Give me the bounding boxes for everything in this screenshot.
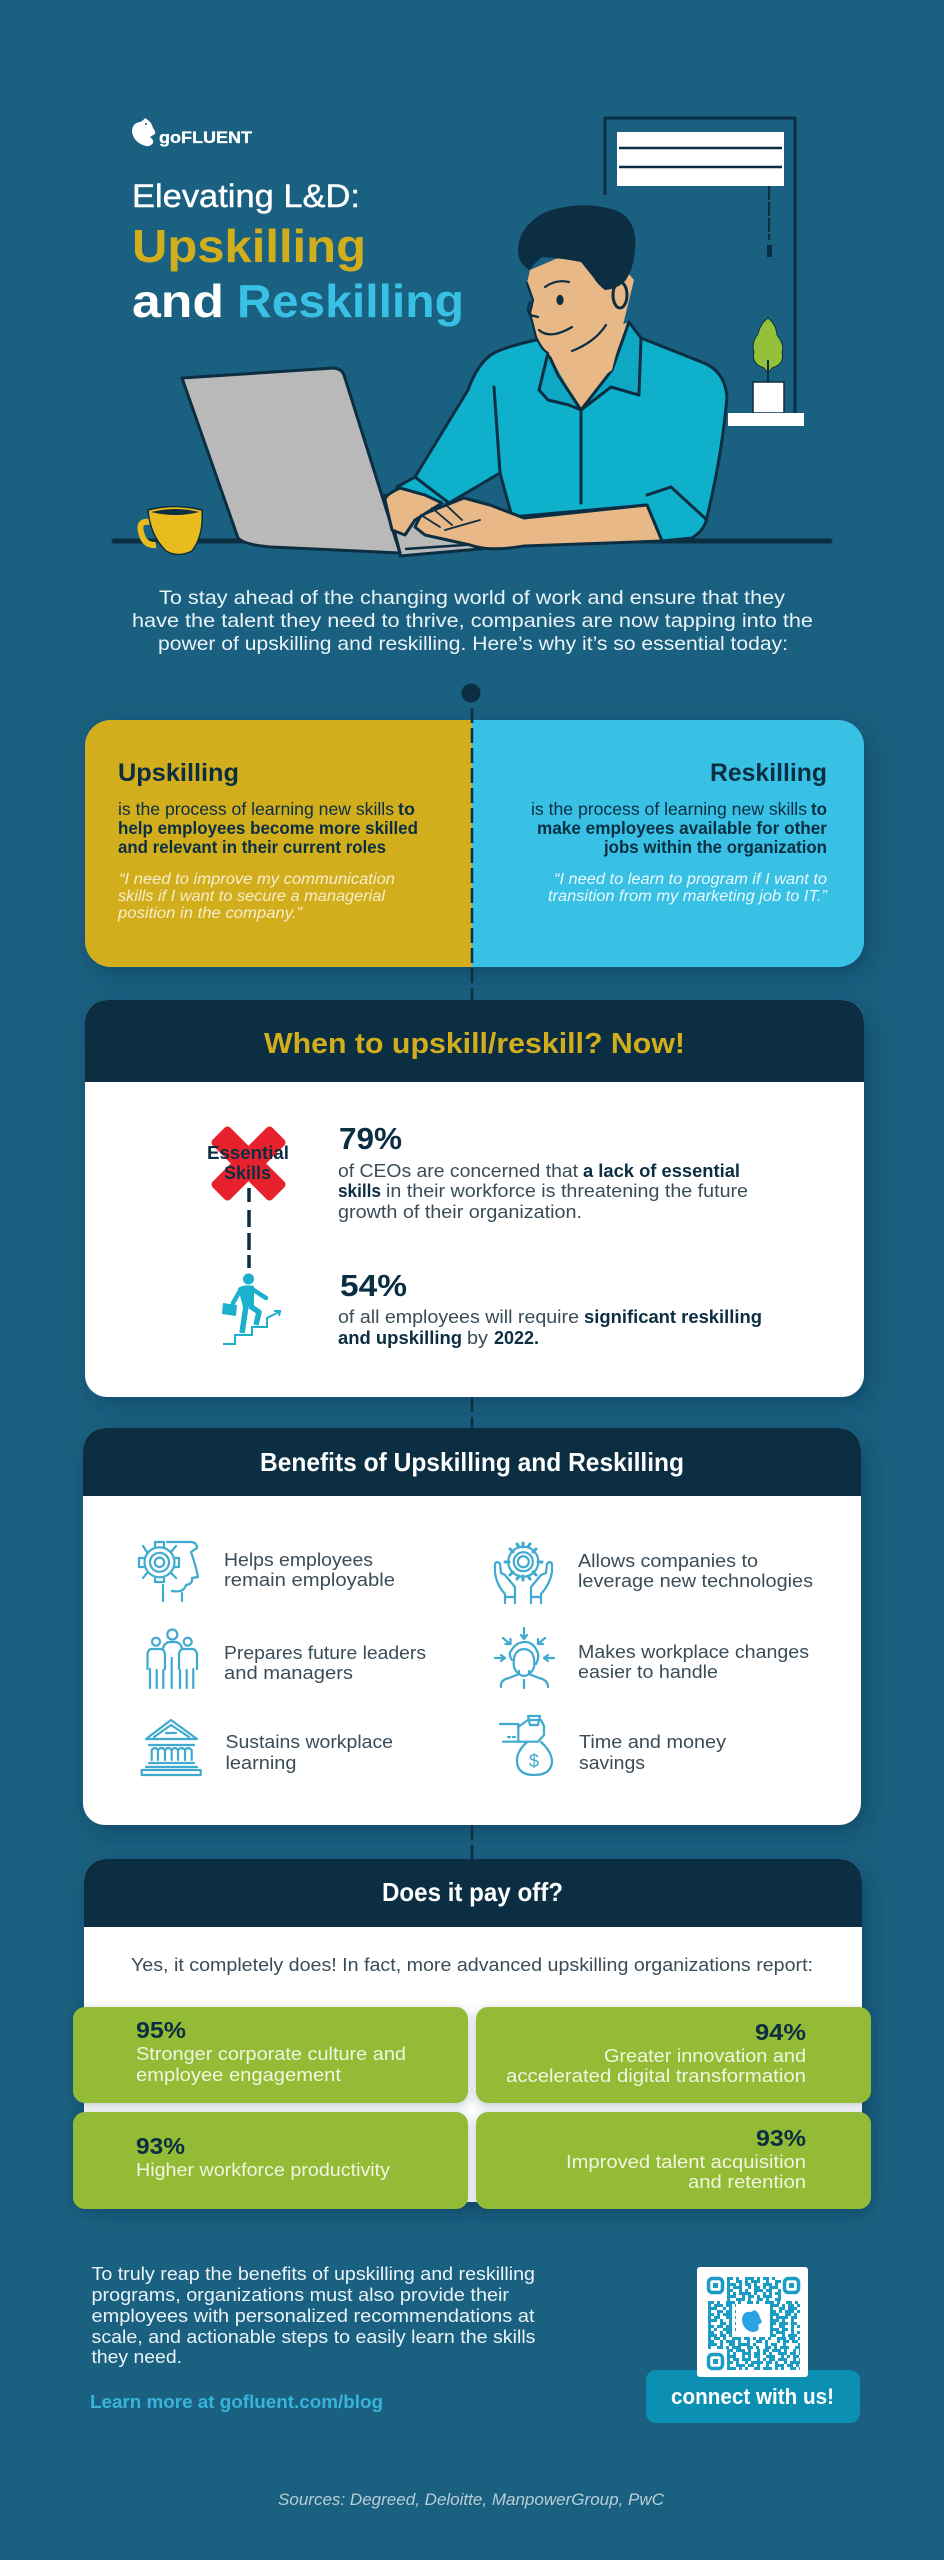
stat card: 94%: 94% — [755, 2019, 806, 2045]
shirt — [397, 338, 727, 541]
hair — [518, 205, 635, 290]
closing text — [92, 2264, 536, 2367]
panel: does it pay off — [73, 1859, 871, 2209]
stat card: 93% productivity: 93% — [136, 2133, 185, 2159]
icon: hands holding gear — [495, 1543, 552, 1603]
stat card: 95%: Stronger corporate culture and — [136, 2044, 406, 2064]
text — [578, 1642, 809, 1682]
sources: Sources: Degreed, Deloitte, ManpowerGroup, PwC — [278, 2491, 664, 2509]
stat card: 95%: employee engagement — [136, 2065, 341, 2085]
closing text: To truly reap the benefits of upskilling and reskilling — [92, 2264, 535, 2284]
panel: upskilling — [85, 720, 472, 967]
closing text: scale, and actionable steps to easily learn the skills — [92, 2327, 536, 2347]
panel: reskilling: jobs within the organization — [603, 837, 827, 857]
panel: reskilling: “I need to learn to program if I want to — [554, 871, 827, 888]
text: remain employable — [224, 1570, 395, 1590]
panel: reskilling: transition from my marketing job to IT.” — [548, 888, 828, 905]
intro text: power of upskilling and reskilling. Here’s why it’s so essential today: — [158, 633, 788, 655]
shirt details — [397, 387, 707, 520]
text: Yes, it completely does! In fact, more advanced upskilling organizations report: — [131, 1955, 813, 1975]
icon: crossed out essential skills: Essential — [207, 1143, 289, 1163]
QR code — [697, 2267, 808, 2377]
button: connect with us: connect with us! — [671, 2384, 834, 2409]
stat: 79%: a lack of essential — [583, 1161, 740, 1181]
title: Elevating L&D: — [132, 178, 360, 214]
stat: 54% — [338, 1268, 762, 1348]
intro text — [132, 587, 813, 655]
stat card: 94% — [476, 2007, 871, 2103]
icon: team of leaders — [148, 1630, 197, 1688]
stat card: 95%: 95% — [136, 2017, 186, 2043]
desk line — [114, 538, 830, 544]
panel: reskilling: to — [811, 799, 827, 819]
icon: hand holding money bag — [500, 1716, 552, 1775]
panel: upskilling: help employees become more skilled — [118, 818, 418, 838]
timeline dot — [462, 684, 480, 702]
stat: 54%: significant reskilling — [584, 1307, 762, 1327]
stat card: 93% talent: 93% — [756, 2125, 806, 2151]
chest skin — [548, 322, 629, 410]
text: Makes workplace changes — [578, 1642, 809, 1662]
stat: 79%: in their workforce is threatening the future — [386, 1181, 748, 1201]
panel: when to upskill — [85, 1000, 864, 1397]
facial features — [528, 281, 572, 334]
text — [226, 1732, 393, 1773]
stat card: 94%: Greater innovation and — [604, 2046, 806, 2066]
collar — [539, 322, 641, 410]
heading: When to upskill/reskill? Now! — [264, 1028, 685, 1060]
panel: upskilling: skills if I want to secure a managerial — [118, 888, 386, 905]
stat: 79%: 79% — [339, 1121, 402, 1156]
stat: 54%: of all employees will require — [338, 1307, 579, 1327]
stat card: 93% talent: and retention — [688, 2172, 806, 2192]
stat card: 95% — [73, 2007, 468, 2103]
illustration: man working on laptop — [114, 118, 830, 556]
stat: 79%: skills — [338, 1181, 381, 1201]
potted plant on shelf — [728, 318, 804, 426]
text — [224, 1643, 426, 1683]
title: and — [132, 275, 224, 327]
panel: upskilling: Upskilling — [118, 759, 239, 787]
panel: upskilling: to — [398, 799, 415, 819]
text: Allows companies to — [578, 1551, 758, 1571]
icon: crossed out essential skills — [207, 1130, 289, 1196]
text: leverage new technologies — [578, 1571, 813, 1591]
heading: Does it pay off? — [382, 1877, 563, 1907]
stat: 79%: of CEOs are concerned that — [338, 1161, 578, 1181]
heading: Benefits of Upskilling and Reskilling — [260, 1447, 684, 1477]
stat: 79%: growth of their organization. — [338, 1202, 582, 1222]
face — [527, 240, 634, 392]
text — [579, 1732, 726, 1773]
panel: reskilling — [531, 759, 828, 905]
text: learning — [226, 1753, 296, 1773]
panel: reskilling: Reskilling — [710, 759, 827, 787]
text: Helps employees — [224, 1550, 373, 1570]
stat: 54%: 2022. — [494, 1328, 539, 1348]
text: Sustains workplace — [226, 1732, 393, 1752]
title: Reskilling — [237, 275, 464, 327]
icon: hand holding money bag: $ — [529, 1751, 539, 1771]
text: Prepares future leaders — [224, 1643, 426, 1663]
window with blind — [605, 118, 795, 413]
icon: gear head — [139, 1542, 198, 1601]
panel: reskilling: is the process of learning new skills — [531, 799, 807, 819]
stat: 79% — [338, 1121, 748, 1222]
ear — [613, 282, 627, 308]
link text: Learn more at gofluent.com/blog — [90, 2391, 383, 2412]
panel: benefits — [83, 1428, 861, 1825]
text: savings — [579, 1753, 645, 1773]
text: Time and money — [579, 1732, 726, 1752]
button: connect with us — [646, 2370, 860, 2423]
stat: 54%: 54% — [340, 1268, 407, 1303]
closing text: employees with personalized recommendations at — [92, 2306, 534, 2326]
stat card: 93% productivity: Higher workforce productivity — [136, 2160, 390, 2180]
stat: 54%: by — [467, 1328, 488, 1348]
text: easier to handle — [578, 1662, 718, 1682]
icon: institution building — [142, 1720, 201, 1775]
stat: 54%: and upskilling — [338, 1328, 462, 1348]
laptop — [182, 368, 491, 556]
dashed connector lines — [471, 708, 473, 1859]
intro text: To stay ahead of the changing world of work and ensure that they — [159, 587, 785, 609]
panel: upskilling: and relevant in their current roles — [118, 837, 386, 857]
face outline — [527, 283, 606, 353]
closing text: they need. — [92, 2347, 182, 2367]
text: and managers — [224, 1663, 353, 1683]
logo: goFLUENT: goFLUENT — [159, 128, 253, 147]
panel: upskilling: is the process of learning new skills — [118, 799, 394, 819]
logo: goFLUENT — [132, 118, 253, 147]
text — [578, 1551, 813, 1591]
panel: upskilling: position in the company.” — [117, 905, 303, 922]
panel: reskilling: make employees available for other — [537, 818, 827, 838]
forearm and hands — [415, 498, 662, 549]
closing text: programs, organizations must also provide their — [92, 2285, 509, 2305]
text — [224, 1550, 395, 1590]
icon: crossed out essential skills: Skills — [224, 1163, 271, 1183]
coffee mug — [140, 506, 202, 554]
icon: person climbing stairs — [222, 1274, 280, 1344]
panel: definitions — [85, 720, 864, 967]
stat card: 94%: accelerated digital transformation — [506, 2066, 806, 2086]
title — [132, 178, 464, 327]
title: Upskilling — [132, 220, 366, 272]
dashed connector — [247, 1188, 251, 1268]
stat card: 93% productivity — [73, 2112, 468, 2209]
intro text: have the talent they need to thrive, companies are now tapping into the — [132, 610, 813, 632]
stat card: 93% talent: Improved talent acquisition — [566, 2152, 806, 2172]
icon: change arrows around head — [495, 1628, 554, 1688]
stat card: 93% talent — [476, 2112, 871, 2209]
panel: upskilling: “I need to improve my communication — [119, 871, 395, 888]
